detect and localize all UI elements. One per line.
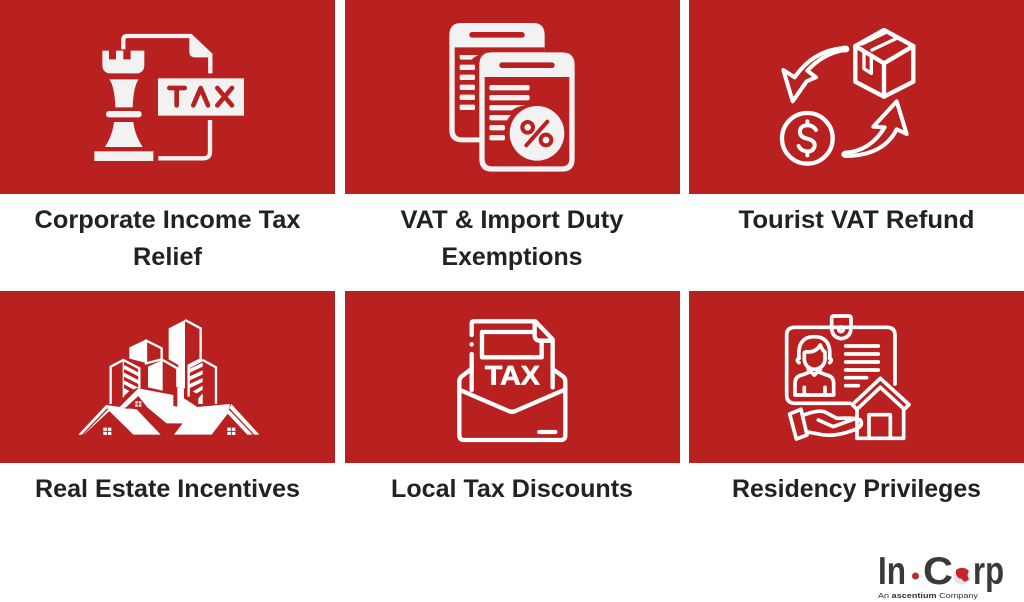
logo: incorp: In <box>878 550 906 593</box>
panel: real estate incentives <box>0 291 335 463</box>
logo: incorp: rp <box>973 550 1004 593</box>
label: residency privileges: Residency Privileges <box>732 475 981 503</box>
label: corporate income tax relief: Corporate Income Tax <box>34 206 301 234</box>
icon: id card, hand and house <box>787 316 909 439</box>
label: real estate incentives: Real Estate Incentives <box>35 475 300 503</box>
icon: documents with percent badge <box>449 23 575 172</box>
logo: incorp: An ascentium Company <box>878 591 978 600</box>
label: relief: Relief <box>133 243 203 271</box>
panel: residency privileges <box>689 291 1024 463</box>
logo: incorp <box>878 550 1004 600</box>
logo: incorp: C <box>923 550 953 593</box>
icon: globe <box>954 568 970 584</box>
panel: vat and import duty exemptions <box>345 0 680 194</box>
rooftops <box>78 388 259 435</box>
icon: box, coin and exchange arrows <box>782 30 913 164</box>
icon: buildings and rooftops <box>78 320 259 435</box>
panel: corporate income tax relief <box>0 0 335 194</box>
panel: local tax discounts <box>345 291 680 463</box>
label: tourist vat refund: Tourist VAT Refund <box>738 206 974 234</box>
icon: rook and tax document <box>94 36 244 161</box>
icon: tax letter in envelope <box>459 321 565 440</box>
label: exemptions: Exemptions <box>442 243 582 271</box>
label: local tax discounts: Local Tax Discounts <box>391 475 633 503</box>
icon: tax letter in envelope: TAX <box>485 361 540 391</box>
panel: tourist vat refund <box>689 0 1024 194</box>
label: vat and import duty: VAT & Import Duty <box>400 206 624 234</box>
